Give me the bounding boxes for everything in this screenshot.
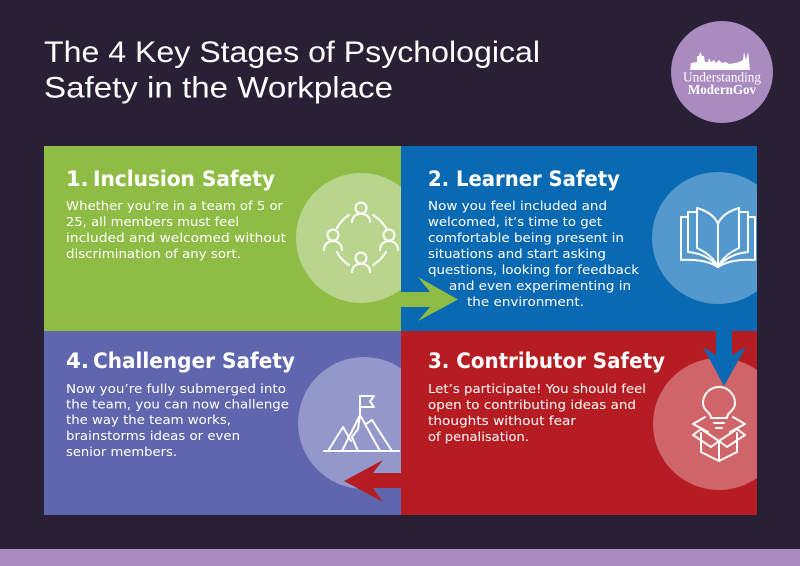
heading: inclusion safety: Inclusion Safety xyxy=(93,167,275,191)
icon: people in a circle xyxy=(324,202,398,272)
heading: challenger safety: Challenger Safety xyxy=(93,349,295,373)
text: contributor safety: thoughts without fear xyxy=(428,414,577,429)
panel: inclusion safety xyxy=(44,146,426,331)
icon: light bulb in a box xyxy=(693,387,745,461)
text: inclusion safety: Whether you’re in a team of 5 or xyxy=(66,199,284,214)
title: The 4 Key Stages of Psychological xyxy=(44,36,540,69)
text: challenger safety: the way the team works, xyxy=(66,413,231,428)
text: learner safety: situations and start asking xyxy=(428,247,606,262)
text: learner safety xyxy=(428,199,640,310)
bottom band xyxy=(0,549,800,566)
text: inclusion safety: 25, all members must feel xyxy=(66,215,239,230)
icon: open book xyxy=(681,208,755,267)
text: learner safety: comfortable being present in xyxy=(428,231,624,246)
text: challenger safety: the team, you can now challenge xyxy=(66,398,289,412)
title: Safety in the Workplace xyxy=(44,72,393,104)
text: challenger safety xyxy=(66,382,289,460)
heading: challenger safety: 4. xyxy=(66,349,89,373)
heading: learner safety: 2. Learner Safety xyxy=(428,167,620,191)
panel: challenger safety xyxy=(44,331,430,515)
text: challenger safety: Now you’re fully submerged into xyxy=(66,382,286,397)
text: challenger safety: senior members. xyxy=(66,445,177,460)
logo: Understanding ModernGov xyxy=(671,21,773,123)
icon backdrop circle: inclusion xyxy=(296,173,401,303)
text: contributor safety: of penalisation. xyxy=(428,430,529,445)
heading: inclusion safety: 1. xyxy=(66,167,89,191)
text: learner safety: questions, looking for feedback xyxy=(428,263,640,278)
text: inclusion safety xyxy=(66,199,286,262)
text: contributor safety: open to contributing ideas and xyxy=(428,398,636,413)
text: inclusion safety: included and welcomed without xyxy=(66,231,286,246)
text: learner safety: welcomed, it’s time to get xyxy=(428,215,602,230)
text: inclusion safety: discrimination of any sort. xyxy=(66,247,241,262)
text: contributor safety xyxy=(428,382,646,445)
arrow: green to learner xyxy=(401,277,458,321)
panel: contributor safety xyxy=(401,331,785,515)
text: challenger safety: brainstorms ideas or even xyxy=(66,429,240,444)
icon: flag on mountain xyxy=(324,396,399,451)
text: learner safety: Now you feel included and xyxy=(428,199,607,214)
arrow: blue to contributor xyxy=(703,331,746,386)
arrow: red to challenger xyxy=(344,460,401,502)
panel: learner safety xyxy=(401,146,784,331)
icon backdrop circle: challenger xyxy=(298,357,401,489)
icon backdrop circle: learner xyxy=(652,172,757,304)
logo: Understanding ModernGov: ModernGov xyxy=(688,83,756,98)
heading: contributor safety: 3. Contributor Safety xyxy=(428,349,665,373)
logo: Understanding ModernGov: Understanding xyxy=(683,70,761,86)
text: learner safety: and even experimenting in xyxy=(449,279,631,294)
title xyxy=(44,36,540,104)
text: learner safety: the environment. xyxy=(467,295,584,310)
icon backdrop circle: contributor xyxy=(653,358,757,490)
text: contributor safety: Let’s participate! You should feel xyxy=(428,382,646,397)
